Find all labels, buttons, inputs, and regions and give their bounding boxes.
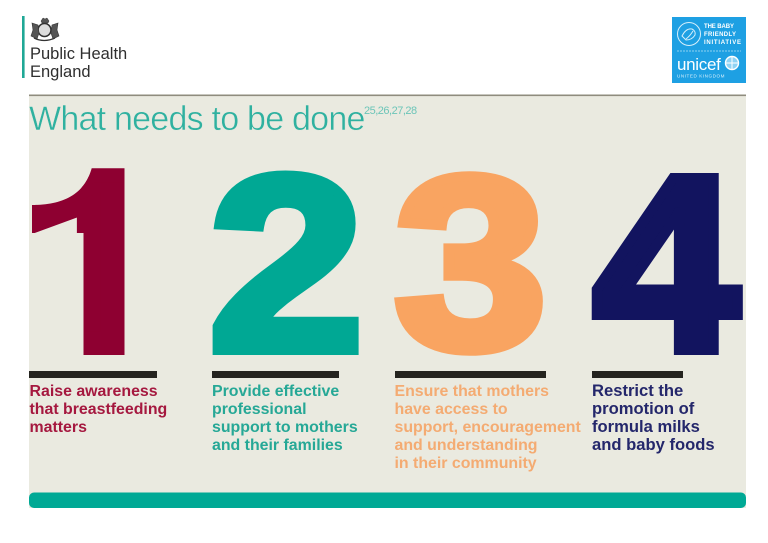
text 4: Restrict the — [592, 381, 683, 400]
text 3: support, encouragement — [394, 419, 582, 436]
text 3 — [394, 383, 582, 472]
text 1: that breastfeeding — [30, 401, 167, 418]
initiative name: INITIATIVE — [704, 40, 741, 46]
text 3: in their community — [394, 455, 537, 472]
icon: mother and baby circle — [678, 22, 700, 46]
column 4: restrict promotion — [592, 125, 741, 454]
main panel background — [29, 95, 746, 508]
text 4 — [592, 381, 715, 454]
numeral 4: 4 — [593, 125, 741, 404]
text 2: professional — [212, 401, 306, 418]
logo wordmark: Public Health — [30, 45, 127, 63]
text 2 — [212, 383, 358, 454]
initiative name: THE BABY — [704, 24, 734, 30]
icon: royal crest — [31, 18, 59, 40]
text 4: formula milks — [592, 417, 700, 436]
unicef wordmark: unicef — [677, 55, 721, 74]
text 2: and their families — [212, 437, 343, 454]
text 4: promotion of — [592, 399, 695, 418]
united kingdom label: UNITED KINGDOM — [677, 74, 725, 78]
logo: Public Health England — [22, 16, 127, 81]
title: What needs to be done — [29, 100, 365, 138]
icon: unicef globe — [726, 56, 738, 70]
text 4: and baby foods — [592, 435, 715, 454]
text 1 — [30, 383, 167, 436]
title references: 25,26,27,28 — [364, 105, 417, 117]
initiative name: FRIENDLY — [704, 32, 736, 38]
column 2: professional support — [208, 125, 364, 454]
initiative name — [704, 24, 741, 46]
text 3: Ensure that mothers — [394, 383, 549, 400]
text 2: Provide effective — [212, 383, 339, 400]
numeral 3: 3 — [394, 127, 547, 401]
numeral 2: 2 — [208, 125, 364, 404]
text 3: and understanding — [394, 437, 538, 454]
column 1: raise awareness — [29, 168, 166, 432]
column 3: community support — [394, 127, 582, 472]
text 1: Raise awareness — [30, 383, 158, 400]
text 1: matters — [30, 419, 87, 436]
footer bar — [29, 492, 746, 508]
text 2: support to mothers — [212, 419, 358, 436]
logo: Baby Friendly Initiative / unicef — [672, 17, 746, 83]
logo: Public Health England: England — [30, 63, 91, 81]
text 3: have access to — [394, 401, 508, 418]
